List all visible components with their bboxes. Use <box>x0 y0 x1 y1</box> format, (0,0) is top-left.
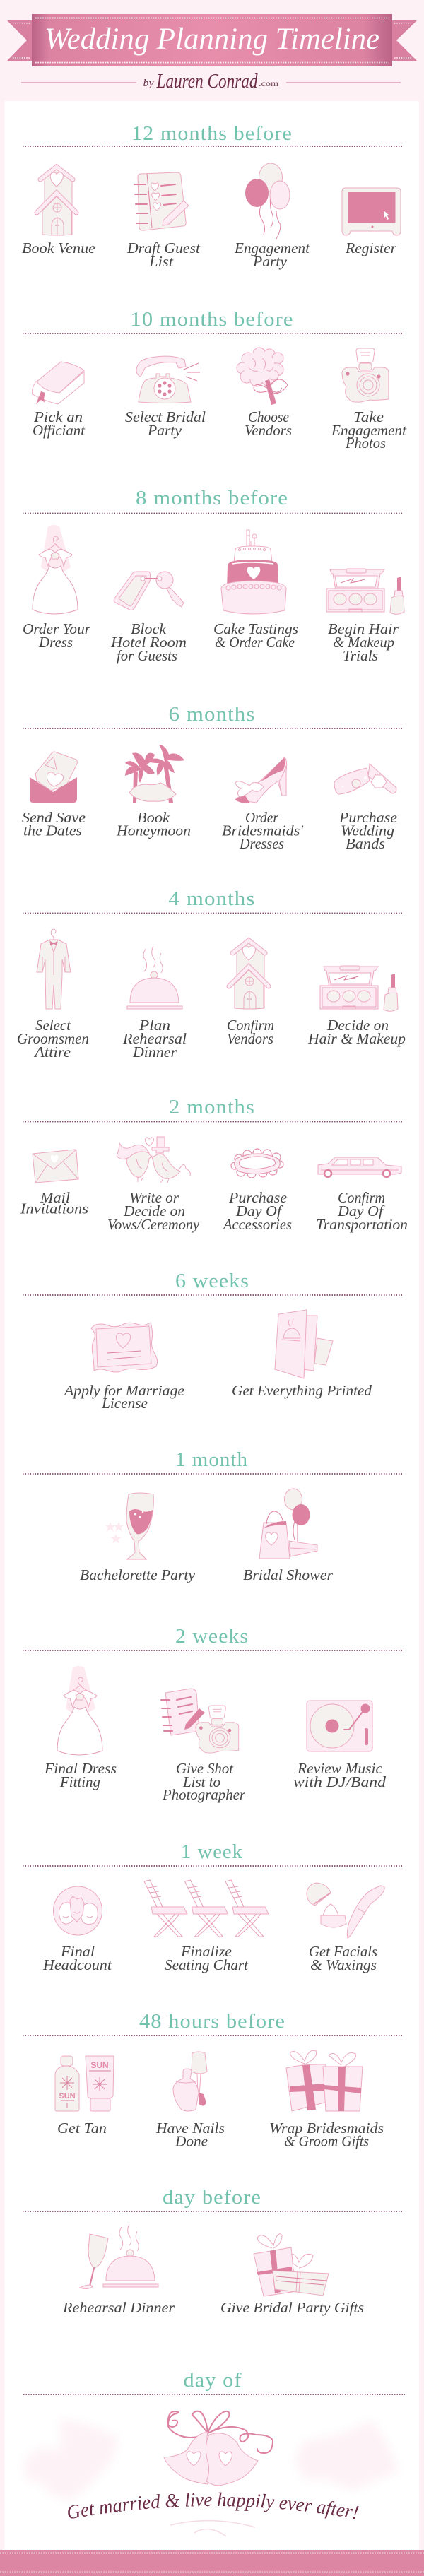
task: Have Nails Done <box>155 2052 225 2149</box>
label: & Order Cake <box>215 634 295 651</box>
icon: wedding bells <box>164 2411 273 2486</box>
task: Mail Invitations <box>20 1150 88 1217</box>
task: Plan Rehearsal Dinner <box>122 946 187 1060</box>
label: Pick an <box>33 408 83 425</box>
footer band <box>0 2550 424 2576</box>
heading: day before <box>163 2187 261 2209</box>
label: Bachelorette Party <box>80 1566 196 1583</box>
label <box>293 1760 387 1790</box>
icon: turntable <box>307 1701 372 1751</box>
icon: book <box>33 362 84 404</box>
task: Final Dress Fitting <box>44 1666 117 1790</box>
label: Vendors <box>227 1030 273 1047</box>
task: Finalize Seating Chart <box>144 1880 269 1973</box>
title banner <box>7 14 417 66</box>
label: List to <box>182 1773 220 1790</box>
label <box>33 408 86 439</box>
label: Bridesmaids' <box>222 822 304 839</box>
icon: palm trees and hammock <box>125 745 184 803</box>
icon: two wrapped gifts <box>286 2050 363 2111</box>
label: Finalize <box>180 1943 232 1960</box>
label: Rehearsal Dinner <box>62 2299 175 2316</box>
task: Write or Decide on Vows/Ceremony <box>107 1137 200 1233</box>
icon: church <box>37 167 76 235</box>
label: Honeymoon <box>116 822 191 839</box>
label: Attire <box>33 1044 71 1060</box>
icon: tuxedo <box>37 929 71 1009</box>
icon: computer screen <box>342 188 401 235</box>
label: Decide on <box>123 1203 185 1219</box>
heading: 6 months <box>168 704 256 726</box>
task: Book Venue <box>22 167 95 256</box>
label: Have Nails <box>155 2120 225 2137</box>
label: Officiant <box>33 422 86 439</box>
label: Hotel Room <box>110 634 187 651</box>
icon: cloche <box>127 946 182 1009</box>
label <box>222 1189 292 1233</box>
ribbon body <box>32 14 392 66</box>
label: Fitting <box>59 1773 100 1790</box>
icon: facial cream and nail file <box>307 1883 384 1938</box>
icon: gifts <box>254 2234 329 2296</box>
label: Wrap Bridesmaids <box>269 2120 384 2137</box>
icon: dress <box>33 525 78 614</box>
task: Begin Hair & Makeup Trials <box>326 569 404 664</box>
section: 10 months before <box>23 309 407 451</box>
label <box>316 1189 408 1233</box>
label: List <box>148 253 174 270</box>
section: 4 months <box>17 888 406 1060</box>
task: Block Hotel Room for Guests <box>110 572 187 664</box>
label: Register <box>345 240 397 256</box>
watercolor wash right <box>294 2421 399 2491</box>
heading: 12 months before <box>131 123 293 145</box>
task: Order Your Dress <box>23 525 91 651</box>
label: Confirm <box>227 1017 274 1034</box>
label: Headcount <box>42 1956 112 1973</box>
label <box>245 408 292 439</box>
icon: champagne glass <box>105 1493 153 1559</box>
icon: makeup compact <box>320 966 398 1011</box>
icon: key and tag <box>114 572 184 610</box>
label: Party <box>252 253 288 270</box>
label: Day Of <box>337 1203 385 1219</box>
label <box>126 240 201 270</box>
label: Engagement <box>331 422 407 439</box>
label: Final Dress <box>44 1760 117 1777</box>
section: 2 months <box>20 1097 408 1233</box>
label: for Guests <box>117 647 177 664</box>
label <box>122 1017 187 1060</box>
task: Cake Tastings & Order Cake <box>213 530 298 651</box>
label: Book <box>137 809 170 826</box>
label: Purchase <box>228 1189 287 1206</box>
heading: 1 week <box>181 1841 243 1863</box>
ribbon tail right <box>391 20 417 61</box>
label: Dresses <box>239 835 284 852</box>
label <box>125 408 206 439</box>
label: Choose <box>248 408 289 425</box>
label: Plan <box>139 1017 170 1034</box>
label <box>328 620 399 664</box>
icon: sunscreen bottles: SUN <box>90 2060 109 2070</box>
section: 8 months before <box>23 488 404 664</box>
icon: camera <box>342 348 389 402</box>
label: Engagement <box>234 240 310 256</box>
heading: 4 months <box>168 888 256 910</box>
byline: by <box>143 78 154 89</box>
task: Give Shot List to Photographer <box>161 1689 246 1803</box>
label: Invitations <box>20 1200 88 1217</box>
task: Confirm Day Of Transportation <box>316 1157 408 1233</box>
heading: 2 months <box>169 1097 255 1118</box>
task: Select Groomsmen Attire <box>17 929 89 1060</box>
task: Draft Guest List <box>126 172 201 270</box>
icon: balloons <box>245 163 290 239</box>
label: & Groom Gifts <box>284 2132 369 2149</box>
task: Rehearsal Dinner <box>62 2224 175 2316</box>
label: Rehearsal <box>122 1030 187 1047</box>
label: & Makeup <box>333 634 394 651</box>
label: Order <box>245 809 279 826</box>
title text: Wedding Planning Timeline <box>45 23 379 56</box>
label: Order Your <box>23 620 91 637</box>
label: Take <box>353 408 384 425</box>
label: Get Everything Printed <box>232 1382 372 1399</box>
task: Take Engagement Photos <box>331 348 407 451</box>
icon: printed menu <box>275 1310 333 1378</box>
label: Vendors <box>245 422 292 439</box>
icon: makeup compact <box>326 569 404 614</box>
icon: notebook and camera <box>161 1689 239 1753</box>
heading: 6 weeks <box>175 1270 249 1292</box>
label: Photos <box>345 435 386 451</box>
ribbon tail left <box>7 20 33 61</box>
label <box>222 809 304 852</box>
task: Get Facials & Waxings <box>307 1883 384 1973</box>
flourish <box>170 2521 255 2536</box>
label: Review Music <box>297 1760 383 1777</box>
icon: sunscreen bottles: SUN <box>59 2092 76 2101</box>
task: Get Everything Printed <box>232 1310 372 1399</box>
section: day of <box>23 2370 405 2536</box>
byline: Lauren Conrad <box>156 70 258 93</box>
label <box>155 2120 225 2149</box>
icon: bracelet <box>231 1149 283 1178</box>
label: Write or <box>129 1189 179 1206</box>
label <box>22 809 86 839</box>
icon: sunscreen bottles <box>55 2056 114 2111</box>
label <box>309 1943 377 1973</box>
label <box>17 1017 89 1060</box>
label: Get Facials <box>309 1943 377 1960</box>
label <box>307 1017 406 1047</box>
byline <box>21 70 401 93</box>
task: Order Bridesmaids' Dresses <box>222 757 304 852</box>
label: Transportation <box>316 1216 408 1233</box>
task: Purchase Day Of Accessories <box>222 1149 292 1233</box>
label: Give Shot <box>176 1760 234 1777</box>
label <box>63 1382 184 1412</box>
icon: rings <box>334 764 396 794</box>
label: License <box>101 1395 148 1412</box>
icon: dress <box>57 1666 102 1755</box>
label: Block <box>131 620 167 637</box>
task: Apply for Marriage License <box>63 1323 184 1412</box>
label: the Dates <box>23 822 82 839</box>
icon: church <box>229 940 269 1009</box>
label: Confirm <box>338 1189 385 1206</box>
section: 6 months <box>22 704 404 852</box>
label <box>23 620 91 651</box>
heading: 10 months before <box>130 309 294 331</box>
label: Select <box>35 1017 71 1034</box>
label: Book Venue <box>22 240 95 256</box>
icon: folding chairs <box>144 1880 269 1937</box>
label <box>165 1943 249 1973</box>
icon: envelope with card <box>30 752 77 803</box>
heading: day of <box>184 2370 242 2392</box>
heading: 2 weeks <box>175 1626 249 1648</box>
task: Choose Vendors <box>237 348 292 439</box>
label: & Waxings <box>310 1956 377 1973</box>
icon: envelope <box>33 1150 78 1183</box>
label: Bridal Shower <box>243 1566 334 1583</box>
label <box>116 809 191 839</box>
heading: 8 months before <box>136 488 288 509</box>
label: Final <box>60 1943 95 1960</box>
label: Hair & Makeup <box>307 1030 406 1047</box>
watercolor wash left <box>24 2418 119 2501</box>
task: Give Bridal Party Gifts <box>220 2234 364 2316</box>
task: Engagement Party <box>234 163 310 270</box>
label <box>213 620 298 651</box>
section: 6 weeks <box>23 1270 404 1412</box>
icon: flute and cloche <box>80 2224 158 2289</box>
task: Select Bridal Party <box>125 356 206 439</box>
section: 12 months before <box>22 123 404 270</box>
icon: group of faces <box>54 1886 102 1935</box>
label <box>107 1189 200 1233</box>
label <box>44 1760 117 1790</box>
label: Purchase <box>338 809 397 826</box>
task: Purchase Wedding Bands <box>334 764 397 852</box>
label: Begin Hair <box>328 620 399 637</box>
label: Decide on <box>326 1017 389 1034</box>
task: Pick an Officiant <box>33 362 86 439</box>
heading: 48 hours before <box>139 2011 285 2033</box>
icon: wedding cake <box>221 530 286 614</box>
label: Dinner <box>132 1044 177 1060</box>
icon: telephone <box>136 356 200 403</box>
label: Vows/Ceremony <box>107 1216 200 1233</box>
label: Accessories <box>222 1216 292 1233</box>
label <box>162 1760 246 1803</box>
label <box>110 620 187 664</box>
label <box>42 1943 112 1973</box>
icon: shoe <box>235 757 287 803</box>
task: Bachelorette Party <box>80 1493 196 1583</box>
label: Groomsmen <box>17 1030 89 1047</box>
icon: limousine <box>318 1157 401 1177</box>
byline: .com <box>259 78 279 88</box>
label: Get Tan <box>57 2120 107 2137</box>
icon: love birds <box>117 1137 190 1183</box>
label: Done <box>175 2132 208 2149</box>
label: Seating Chart <box>165 1956 249 1973</box>
heading: 1 month <box>175 1449 248 1471</box>
section: 1 week <box>23 1841 404 1973</box>
task: Register <box>342 188 401 256</box>
label <box>338 809 397 852</box>
section: day before <box>23 2187 404 2316</box>
task: Wrap Bridesmaids & Groom Gifts <box>269 2050 384 2149</box>
task: Review Music with DJ/Band <box>293 1701 387 1790</box>
task: Book Honeymoon <box>116 745 191 839</box>
section: 1 month <box>23 1449 404 1583</box>
label <box>20 1189 88 1217</box>
label: Select Bridal <box>125 408 206 425</box>
label <box>227 1017 274 1047</box>
label: Draft Guest <box>126 240 201 256</box>
task: Confirm Vendors <box>227 940 274 1047</box>
icon: gift bag and balloons <box>259 1489 317 1559</box>
label: Apply for Marriage <box>63 1382 184 1399</box>
icon: nail polish <box>173 2052 207 2111</box>
task: Final Headcount <box>42 1886 112 1973</box>
label <box>234 240 310 270</box>
label: Cake Tastings <box>213 620 298 637</box>
icon: certificate <box>91 1323 158 1372</box>
task: Get Tan <box>55 2056 114 2137</box>
label: Day Of <box>235 1203 283 1219</box>
label: Dress <box>38 634 73 651</box>
label: Send Save <box>22 809 86 826</box>
label: Trials <box>343 647 378 664</box>
section: 48 hours before <box>23 2011 404 2149</box>
label <box>331 408 407 451</box>
label <box>269 2120 384 2149</box>
label: Give Bridal Party Gifts <box>220 2299 364 2316</box>
label: Photographer <box>162 1786 246 1803</box>
closing message: Get married & live happily ever after! <box>68 2493 359 2519</box>
task: Decide on Hair & Makeup <box>307 966 406 1047</box>
task: Bridal Shower <box>243 1489 334 1583</box>
icon: notebook <box>134 172 189 230</box>
label: Wedding <box>341 822 394 839</box>
label: Mail <box>40 1189 70 1206</box>
icon: bouquet <box>237 348 288 405</box>
label: Bands <box>346 835 385 852</box>
label: with DJ/Band <box>293 1773 387 1790</box>
label: Party <box>147 422 182 439</box>
section: 2 weeks <box>23 1626 404 1803</box>
task: Send Save the Dates <box>22 752 86 839</box>
